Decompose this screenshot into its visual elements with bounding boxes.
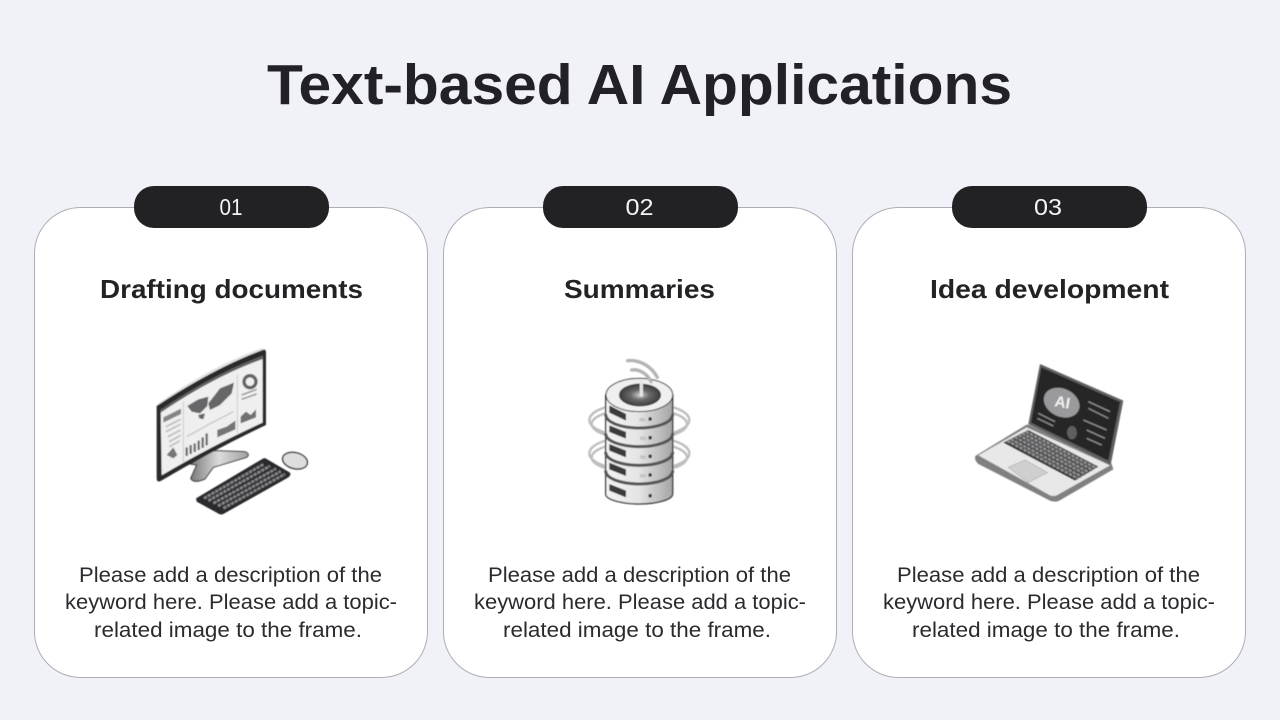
card 1 number badge: 01	[220, 194, 242, 220]
card 1 description	[65, 564, 397, 642]
title: Text-based AI Applications	[267, 53, 1012, 117]
panel: card 3	[852, 186, 1246, 678]
card 2 number badge: 02	[626, 194, 654, 220]
card 2 description	[474, 564, 806, 642]
icon: desktop computer	[157, 348, 309, 514]
card 3 description: Please add a description of the	[897, 564, 1200, 587]
icon: laptop: AI	[1053, 393, 1071, 413]
card 3 heading: Idea development	[930, 274, 1169, 304]
card 2 heading: Summaries	[564, 274, 715, 304]
card 2 description: related image to the frame.	[503, 619, 771, 642]
card 3 background	[852, 208, 1246, 678]
card 1 background	[34, 208, 428, 678]
card 2 background	[444, 208, 836, 678]
card 1 description: keyword here. Please add a topic-	[65, 591, 397, 614]
card 3 description: keyword here. Please add a topic-	[883, 591, 1215, 614]
card 2 description: keyword here. Please add a topic-	[474, 591, 806, 614]
icon: database server	[589, 361, 689, 504]
card 3 description: related image to the frame.	[912, 619, 1180, 642]
card 3 number badge: 03	[1034, 194, 1062, 220]
card 3 description	[883, 564, 1215, 642]
card 2 description: Please add a description of the	[488, 564, 791, 587]
panel: card 1	[34, 186, 428, 678]
card 1 heading: Drafting documents	[100, 274, 363, 304]
card 1 description: related image to the frame.	[94, 619, 362, 642]
icon: laptop	[975, 364, 1123, 502]
card 2 number badge	[543, 186, 738, 228]
card 1 description: Please add a description of the	[79, 564, 382, 587]
panel: card 2	[444, 186, 836, 678]
card 3 number badge	[952, 186, 1147, 228]
card 1 number badge	[134, 186, 329, 228]
